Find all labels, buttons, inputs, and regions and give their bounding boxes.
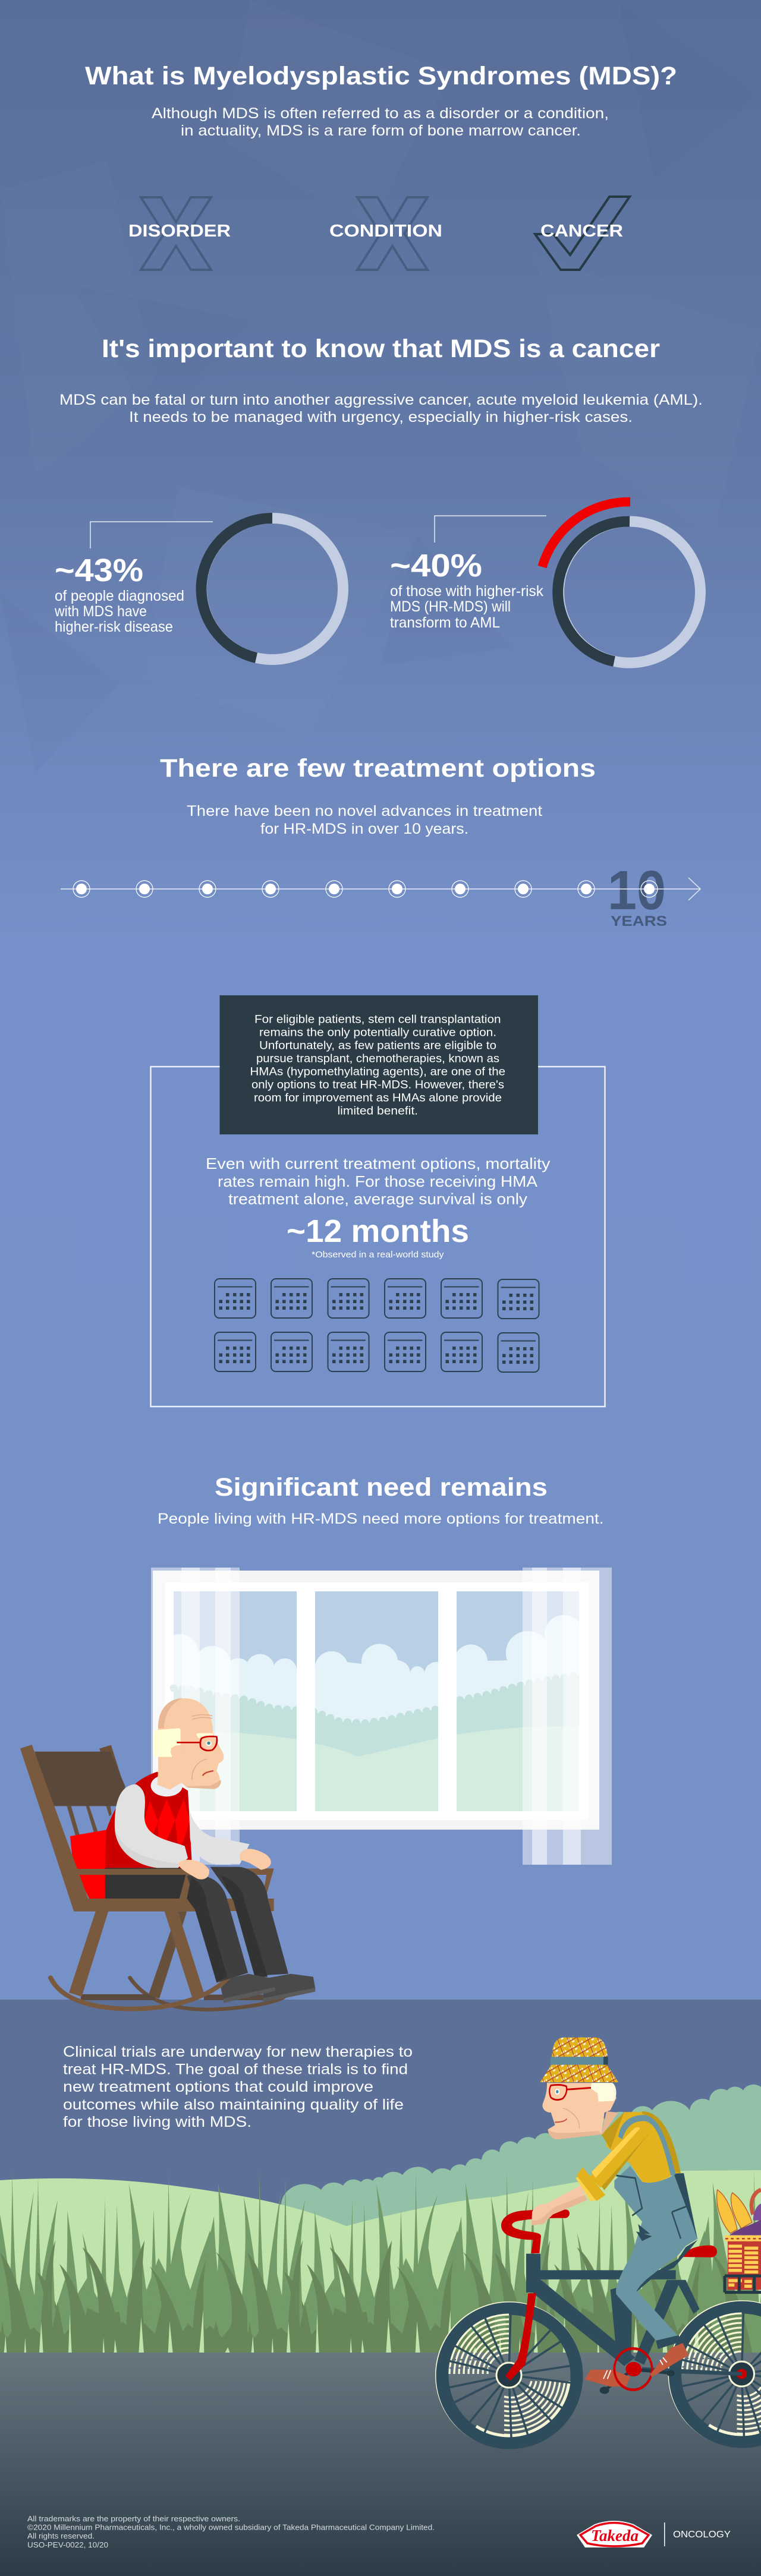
stat: 43 percent with donut: of people diagnosed [55,588,184,604]
Takeda Oncology logo [577,2521,731,2547]
paragraph: no novel advances [187,803,542,837]
far shoe [263,1974,315,2003]
label: disorder with X icon: DISORDER [128,222,231,241]
bicycle and rider [436,2038,761,2448]
footnote: real-world study: *Observed in a real-world study [312,1250,444,1260]
footer legal text [27,2514,435,2549]
rocking chair [34,1745,285,2010]
calendar icons grid [215,1279,539,1372]
far leg [210,1867,288,1976]
footer legal text: All rights reserved. [27,2531,95,2540]
Takeda Oncology logo: Takeda [591,2527,639,2545]
paragraph: no novel advances: There have been no novel advances in treatment [187,803,542,819]
chainring [614,2348,652,2390]
intro paragraph [152,105,609,139]
torso vest [105,1772,192,1868]
callout: stem cell transplantation: For eligible patients, stem cell transplantation [254,1014,501,1026]
far arm [189,1806,250,1864]
man in rocking chair [20,1698,315,2010]
text: mortality rates: treatment alone, average survival is only [228,1190,527,1207]
tall grass [0,2171,761,2353]
handlebars [501,2209,570,2253]
stat: 40 percent with donut and red arc: MDS (HR-MDS) will [390,598,511,615]
stat: 40 percent with donut and red arc [390,502,700,663]
footer legal text: ©2020 Millennium Pharmaceuticals, Inc., a wholly owned subsidiary of Takeda Pharmaceutical Company Limited. [27,2523,435,2531]
paragraph: more options: People living with HR-MDS need more options for treatment. [158,1511,603,1527]
page background [0,0,761,2003]
callout: stem cell transplantation: only options to treat HR-MDS. However, there's [251,1079,504,1091]
label: condition with X icon: CONDITION [329,222,442,241]
stat: 43 percent with donut: ~43% [55,553,143,588]
intro paragraph: Although MDS is often referred to as a disorder or a condition, [152,105,609,122]
callout: stem cell transplantation: Unfortunately, as few patients are eligible to [259,1040,496,1052]
rack, basket and corn [717,2190,761,2293]
rider shirt and strap [590,2111,681,2190]
paragraph: fatal or AML: MDS can be fatal or turn into another aggressive cancer, acute myeloid leukemia (AML). [59,392,703,408]
rider hat [540,2038,618,2082]
stat: 40 percent with donut and red arc: of those with higher-risk [390,583,543,600]
callout: stem cell transplantation [220,995,538,1134]
text: clinical trials: treat HR-MDS. The goal of these trials is to find [63,2061,408,2077]
rider near shoe [650,2343,688,2377]
near leg [187,1875,248,1983]
label: disorder with X icon [128,197,231,270]
text: mortality rates [206,1155,551,1207]
text: clinical trials [63,2044,413,2130]
text: clinical trials: outcomes while also maintaining quality of life [63,2096,404,2113]
paragraph: fatal or AML: It needs to be managed with urgency, especially in higher-risk cases. [129,409,633,425]
road [0,2353,761,2576]
trousers seat [105,1868,187,1899]
fork [505,2293,536,2380]
stat: 40 percent with donut and red arc: ~40% [390,548,482,584]
callout: stem cell transplantation: remains the only potentially curative option. [259,1027,496,1039]
footer legal text: USO-PEV-0022, 10/20 [27,2540,108,2549]
paragraph: no novel advances: for HR-MDS in over 10 years. [260,821,468,837]
stat: 40 percent with donut and red arc: transform to AML [390,614,500,631]
heading: important to know: It's important to know that MDS is a cancer [102,335,660,363]
background bushes [281,2085,761,2258]
text: clinical trials: Clinical trials are underway for new therapies to [63,2044,413,2060]
callout: stem cell transplantation: HMAs (hypomethylating agents), are one of the [250,1066,505,1078]
near shoe [221,1974,275,2003]
saddle [679,2246,717,2257]
text: mortality rates: Even with current treatment options, mortality [206,1155,551,1172]
hands [178,1849,271,1880]
hill [0,2170,761,2353]
callout: stem cell transplantation: room for improvement as HMAs alone provide [254,1092,502,1104]
chair front frame [20,1745,204,1998]
panel: survival frame [151,995,605,1407]
far pedal and crank [584,2369,675,2394]
footer legal text: All trademarks are the property of their respective owners. [27,2514,240,2523]
text: mortality rates: rates remain high. For those receiving HMA [218,1172,538,1190]
ground backdrop [0,2000,761,2356]
Takeda Oncology logo: ONCOLOGY [673,2530,731,2540]
rider legs and overalls [614,2166,697,2341]
timeline with 10 years marker: 10 [608,859,666,921]
heading: significant need: Significant need remains [215,1473,548,1502]
text: clinical trials: new treatment options that could improve [63,2079,373,2095]
title: What is Myelodysplastic Syndromes (MDS)? [85,62,677,90]
label: cancer with check icon [535,197,630,270]
stat: 43 percent with donut: with MDS have [54,603,147,620]
near arm sleeve [115,1784,188,1868]
stat: 43 percent with donut [54,518,343,660]
timeline with 10 years marker [61,859,700,929]
cushion [70,1830,106,1899]
paragraph: fatal or AML [59,392,703,425]
window with landscape and curtains [151,1568,612,1865]
label: condition with X icon [329,197,442,270]
intro paragraph: in actuality, MDS is a rare form of bone marrow cancer. [181,122,581,139]
rider forearm and cuff [532,2167,605,2225]
callout: stem cell transplantation: limited benefit. [338,1105,418,1117]
wheels [436,2303,581,2448]
rocker [51,1978,228,2009]
callout: stem cell transplantation: pursue transplant, chemotherapies, known as [256,1053,499,1065]
stat: 43 percent with donut: higher-risk disease [55,619,173,635]
heading: few treatment options: There are few treatment options [160,754,596,783]
rider head [542,2083,618,2139]
timeline with 10 years marker: YEARS [611,913,667,929]
stat: 12 months: ~12 months [287,1213,469,1249]
text: clinical trials: for those living with MDS. [63,2114,251,2130]
head [151,1698,224,1796]
frame [526,2254,742,2376]
label: cancer with check icon: CANCER [540,222,623,241]
